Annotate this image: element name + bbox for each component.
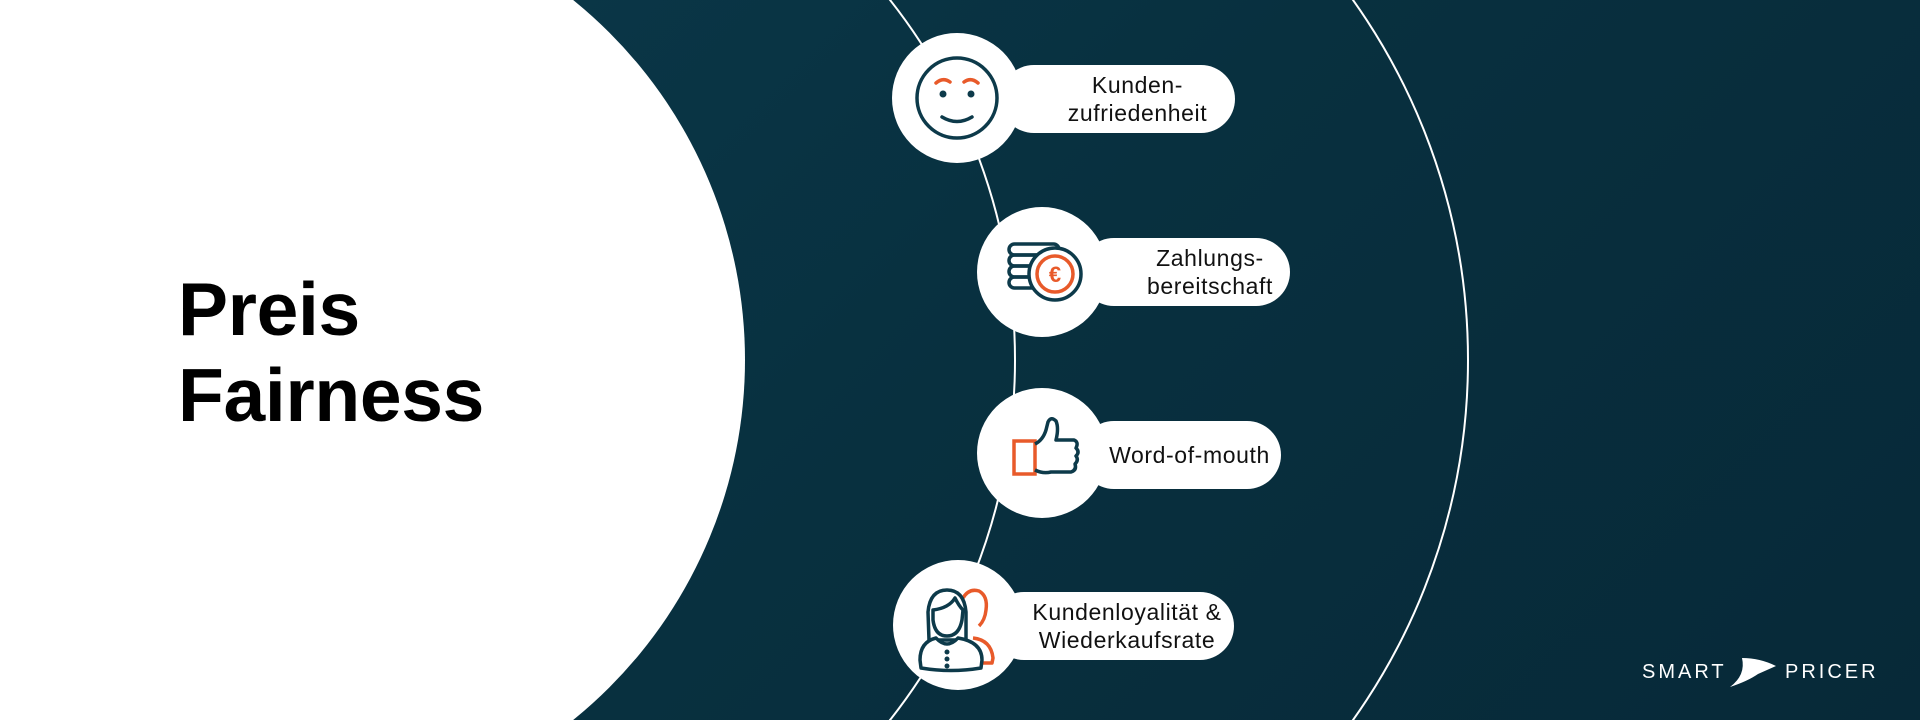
- logo: PRICER: [1785, 661, 1879, 683]
- circle icon: coins euro: [977, 207, 1107, 337]
- pill: Zahlungsbereitschaft: [1080, 238, 1290, 306]
- pill: Word-of-mouth: Word-of-mouth: [1109, 442, 1270, 468]
- title: Fairness: [178, 353, 484, 437]
- circle icon: people: [893, 560, 1023, 690]
- logo: SMART: [1642, 661, 1727, 683]
- pill: Kundenzufriedenheit: [1000, 65, 1235, 133]
- pill: Kundenloyalitaet: [990, 592, 1234, 660]
- pill: Kundenloyalitaet: Wiederkaufsrate: [1039, 627, 1215, 653]
- title: Preis: [178, 267, 360, 351]
- pill: Kundenzufriedenheit: Kunden-: [1092, 72, 1183, 98]
- circle icon: coins euro: €: [1049, 262, 1061, 287]
- pill: Zahlungsbereitschaft: bereitschaft: [1147, 273, 1273, 299]
- pill: Zahlungsbereitschaft: Zahlungs-: [1156, 245, 1264, 271]
- logo: [1642, 658, 1879, 687]
- circle icon: thumbs up: [977, 388, 1107, 518]
- title: [178, 267, 484, 437]
- pill: Kundenzufriedenheit: zufriedenheit: [1068, 100, 1207, 126]
- pill: Word-of-mouth: [1080, 421, 1281, 489]
- pill: Kundenloyalitaet: Kundenloyalität &: [1032, 599, 1222, 625]
- circle icon: smiley: [892, 33, 1022, 163]
